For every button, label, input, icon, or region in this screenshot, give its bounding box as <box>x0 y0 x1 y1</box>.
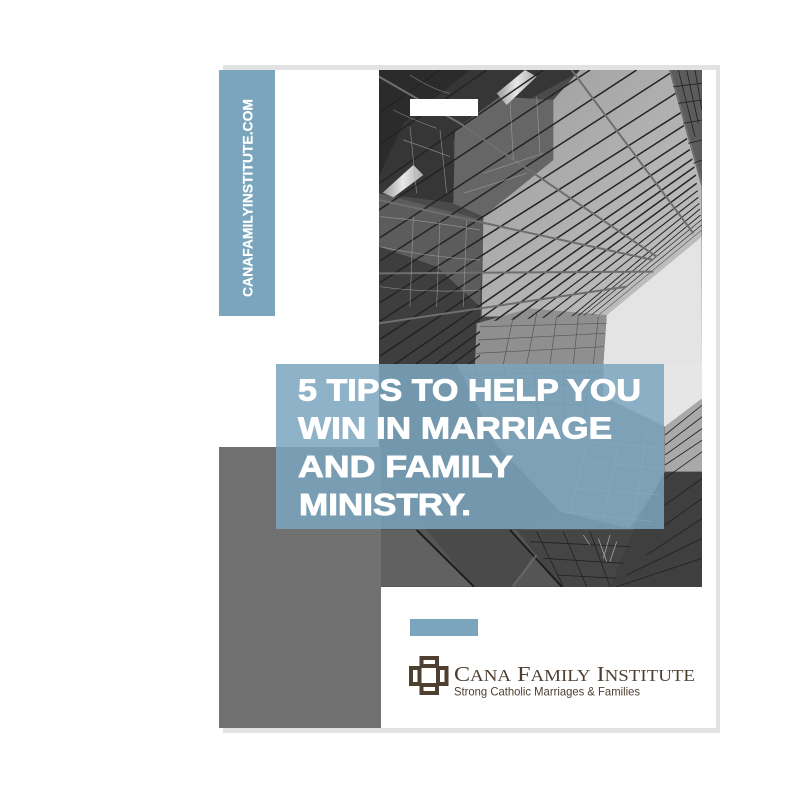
right tower grid <box>673 70 702 163</box>
building beams <box>379 70 702 323</box>
page shadow <box>223 65 720 733</box>
title: WIN IN MARRIAGE <box>298 410 612 446</box>
blue tab <box>410 619 478 636</box>
logo tagline: Strong Catholic Marriages & Families <box>454 684 640 698</box>
white tab <box>410 99 478 116</box>
title: MINISTRY. <box>299 487 471 522</box>
URL side bar <box>219 70 275 316</box>
light panels <box>497 70 537 105</box>
title: 5 TIPS TO HELP YOU <box>298 372 641 408</box>
logo <box>411 658 695 698</box>
icon: cross of four frames <box>411 658 446 693</box>
title panel <box>276 364 664 529</box>
photo: glass skyscrapers <box>379 70 702 587</box>
infographic cover <box>219 65 720 733</box>
URL text: CANAFAMILYINSTITUTE.COM <box>240 99 255 297</box>
title <box>298 372 641 522</box>
reflections <box>380 75 543 307</box>
window mullions <box>379 70 702 364</box>
gray block <box>219 447 381 728</box>
title: AND FAMILY <box>298 449 513 484</box>
logo name: CANA FAMILY INSTITUTE <box>454 662 695 686</box>
white page <box>219 70 716 728</box>
lower tower grid <box>477 313 607 364</box>
